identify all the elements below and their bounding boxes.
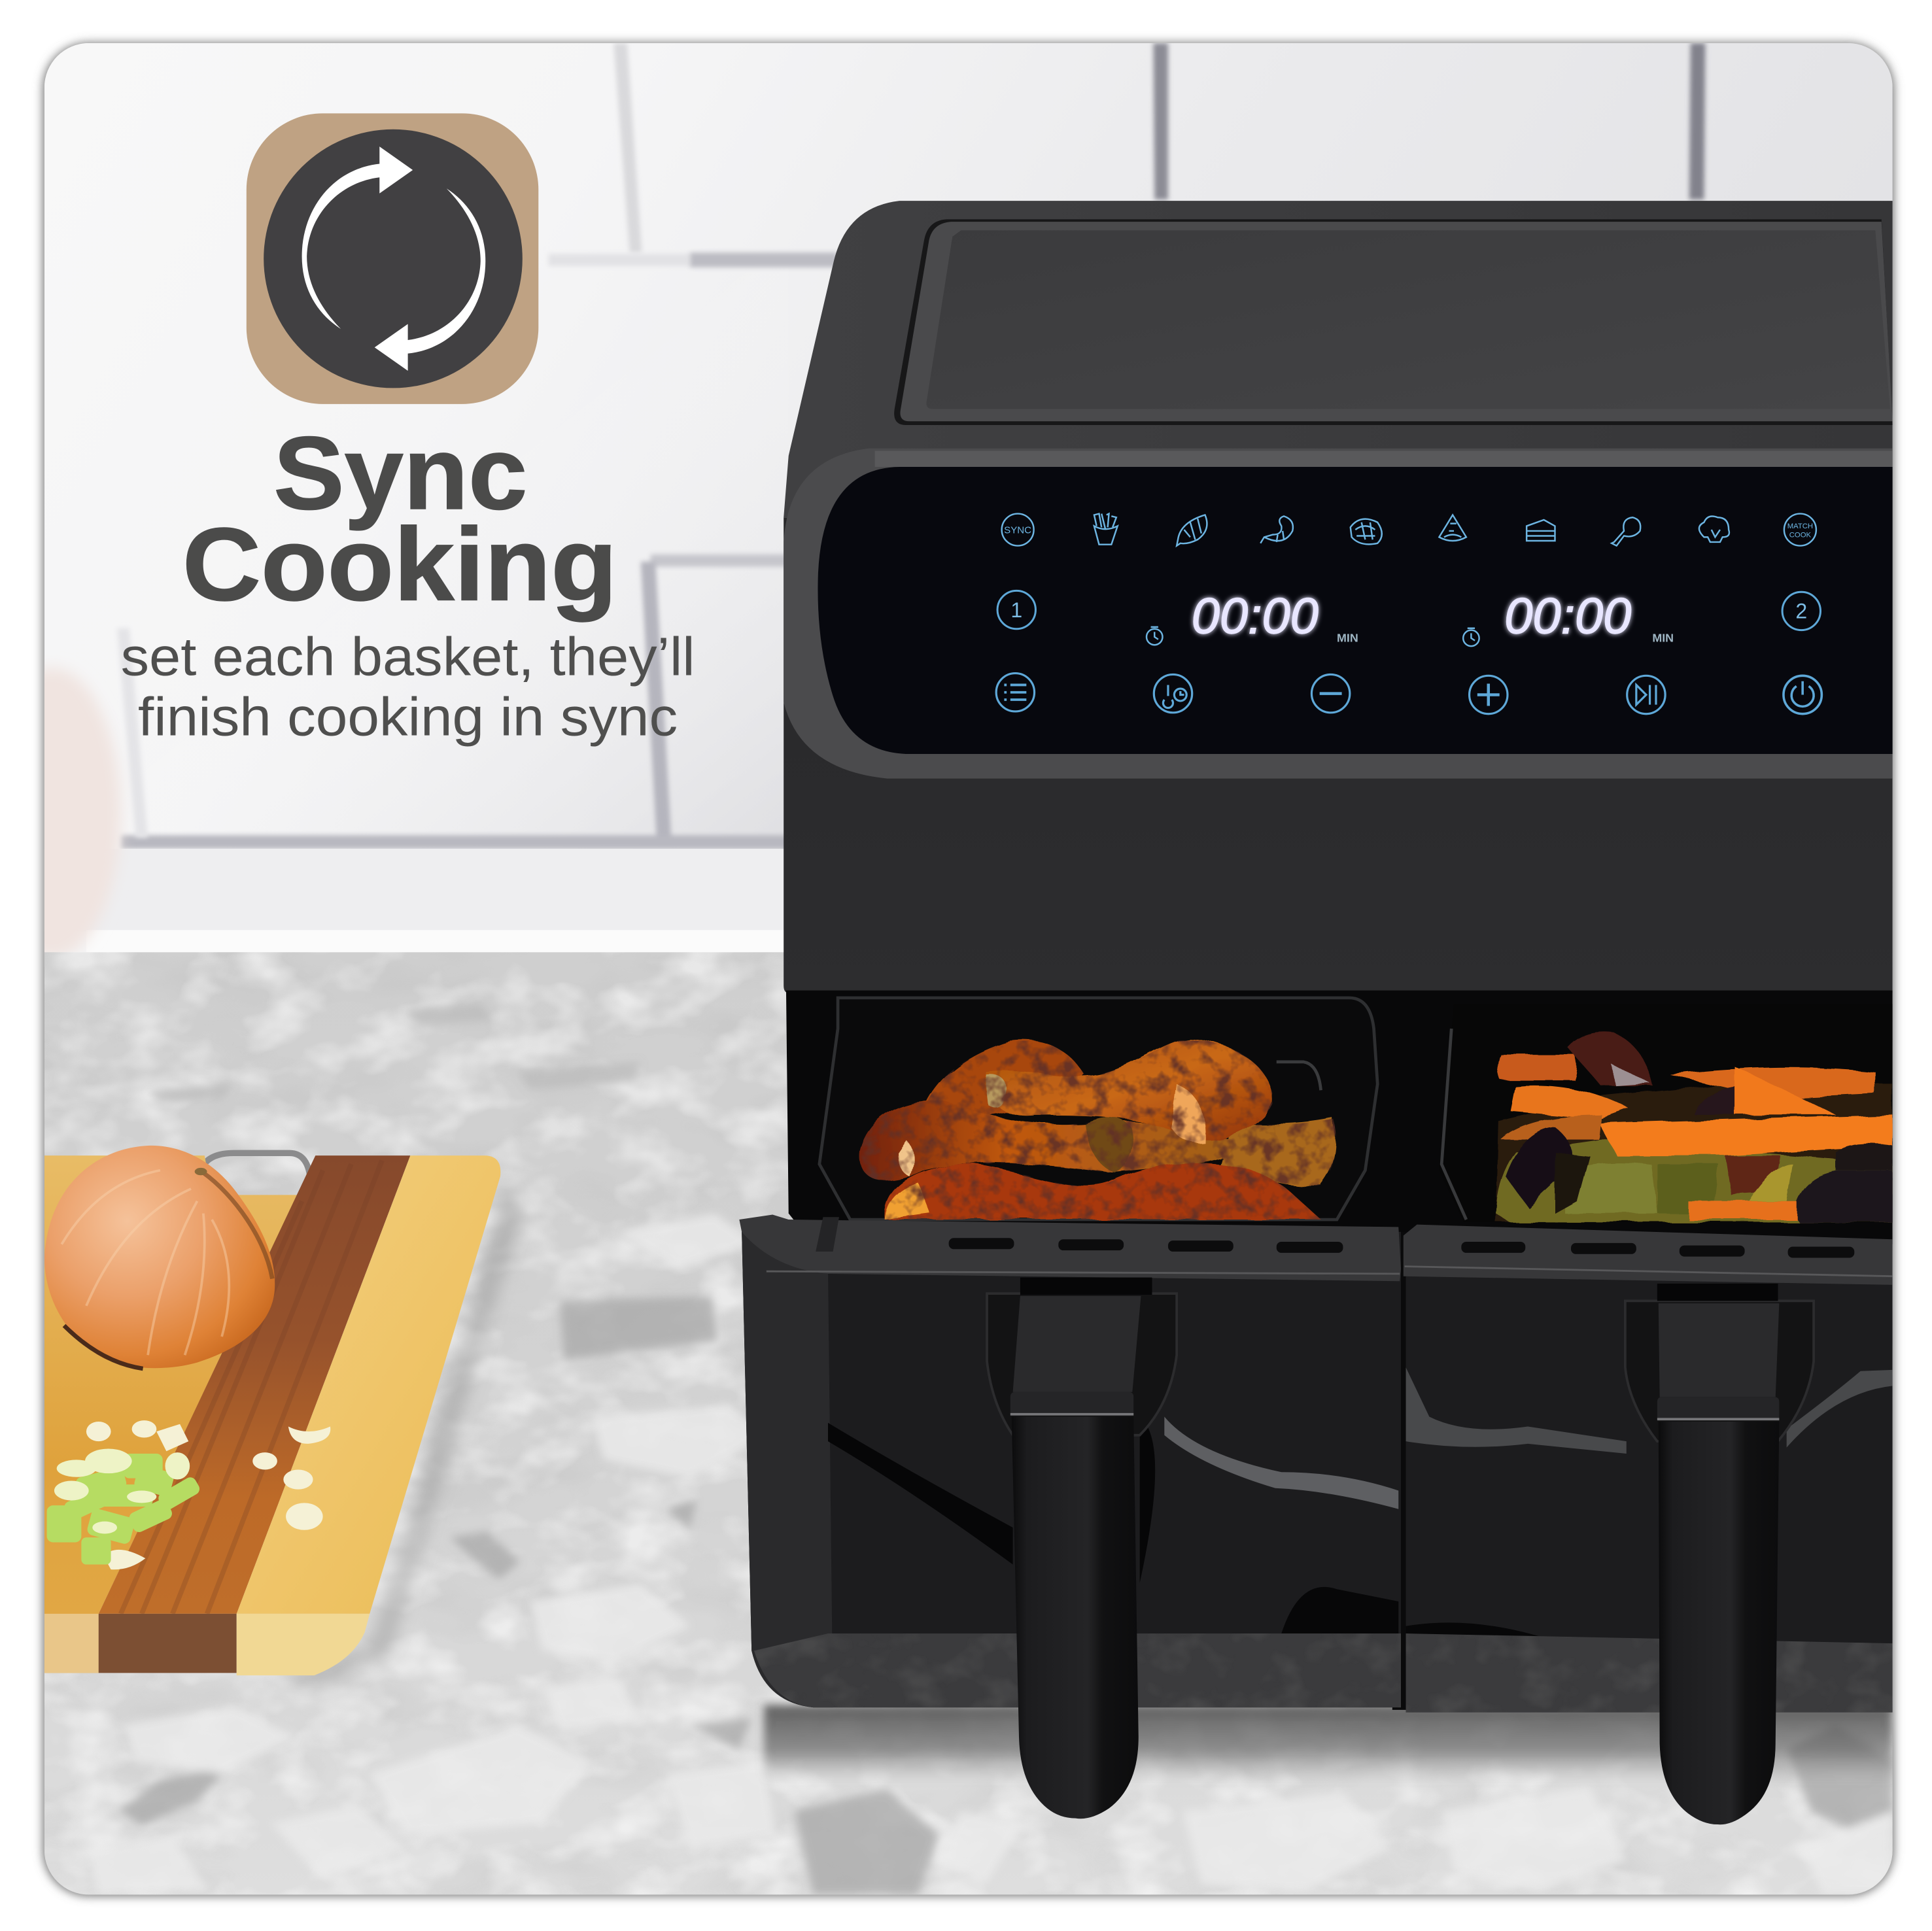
min label left: MIN — [1337, 632, 1358, 645]
drawer side panel — [742, 1232, 833, 1707]
fryer lid — [894, 219, 1893, 425]
board handle — [205, 1150, 311, 1174]
handle collar — [1657, 1397, 1779, 1419]
basket inner handle — [1277, 1062, 1321, 1090]
basket 2 button — [1782, 592, 1820, 630]
icon: minus button — [1311, 674, 1350, 713]
marble countertop — [44, 952, 1893, 1901]
handle bracket — [987, 1293, 1177, 1435]
icon: menu button — [996, 674, 1035, 711]
handle grip — [1659, 1422, 1779, 1824]
left drawer — [742, 1232, 1401, 1707]
left basket — [819, 998, 1377, 1220]
icon: match cook button — [1784, 514, 1816, 546]
air fryer shadow on counter — [764, 1705, 1893, 1781]
basket 2 button: 2 — [1795, 600, 1807, 623]
right drawer rim — [1404, 1225, 1893, 1285]
handle collar — [1010, 1392, 1133, 1414]
arrow bottom — [375, 188, 485, 371]
onion — [44, 1146, 275, 1369]
rim slots — [949, 1238, 1343, 1253]
fryer top housing — [784, 201, 1893, 517]
drawer front — [742, 1232, 1401, 1707]
drawer front — [1406, 1275, 1893, 1713]
icon: drumstick — [1612, 517, 1640, 546]
title: Cooking — [182, 506, 617, 622]
icon: steak — [1351, 519, 1382, 544]
icon: fries — [1094, 514, 1118, 545]
right drawer — [1406, 1275, 1893, 1713]
handle neck — [1013, 1296, 1141, 1392]
title: Sync — [273, 415, 527, 531]
icon: match cook button: MATCH — [1787, 522, 1813, 530]
title — [182, 415, 617, 622]
mode icons row — [1002, 514, 1816, 546]
icon: play pause button — [1627, 675, 1665, 714]
icon: broccoli — [1699, 517, 1729, 542]
icon: timer right — [1463, 628, 1479, 646]
timer display right: 00:00 — [1504, 588, 1631, 644]
timer display left: 00:00 — [1192, 588, 1319, 644]
control panel frame — [784, 449, 1893, 779]
terrazzo chips — [86, 1004, 1893, 1894]
drawer reflections — [1406, 1367, 1627, 1454]
basket 1 button — [997, 590, 1035, 629]
icon: fish — [1177, 515, 1207, 546]
air fryer — [739, 201, 1893, 1824]
left drawer rim — [739, 1215, 1401, 1281]
subtitle — [121, 626, 695, 747]
icon: temperature timer button — [1154, 674, 1192, 713]
basket shell — [1439, 1004, 1893, 1222]
board left maple — [44, 1155, 297, 1673]
drawer reflections — [828, 1423, 1013, 1565]
right basket — [1439, 1004, 1893, 1222]
drawer opening — [786, 991, 1893, 1244]
badge circle — [264, 129, 523, 388]
board shadow — [271, 1183, 523, 1685]
min label right: MIN — [1652, 632, 1674, 645]
subtitle: set each basket, they’ll — [121, 626, 695, 687]
handle bracket — [1625, 1301, 1814, 1441]
faded background object — [44, 666, 127, 957]
badge background — [247, 113, 538, 404]
fryer front body — [784, 517, 1893, 993]
left handle — [987, 1278, 1177, 1819]
roasted vegetables — [1496, 1032, 1893, 1222]
tiled wall — [44, 43, 1893, 967]
glossy lower reflection — [739, 1626, 1893, 1718]
cutting board with onion and scallions — [44, 1146, 523, 1685]
icon: sync button — [1002, 514, 1034, 546]
drawer seam — [1392, 1232, 1412, 1710]
control panel top highlight — [875, 451, 1893, 467]
icon: cake — [1527, 520, 1555, 541]
handle neck — [1659, 1303, 1779, 1397]
board walnut stripe — [99, 1155, 410, 1614]
basket 1 button: 1 — [1010, 598, 1022, 622]
right handle — [1625, 1284, 1814, 1824]
arrow top — [302, 146, 413, 329]
chicken drumsticks — [859, 1038, 1343, 1220]
icon: plus button — [1470, 675, 1508, 714]
panel glass — [818, 467, 1893, 754]
icon: sync button: SYNC — [1004, 525, 1031, 536]
board front edge — [44, 1614, 99, 1673]
icon: pizza — [1439, 515, 1466, 541]
icon: timer left — [1147, 627, 1162, 645]
rim slots — [1461, 1242, 1854, 1257]
icon: shrimp — [1260, 516, 1293, 543]
basket shell — [819, 998, 1377, 1220]
icon: sync arrows badge — [247, 113, 538, 404]
board right maple — [237, 1155, 500, 1614]
handle grip — [1012, 1416, 1139, 1819]
icon: power button — [1784, 675, 1821, 714]
icon: match cook button: COOK — [1789, 531, 1811, 539]
control panel — [818, 467, 1893, 754]
subtitle: finish cooking in sync — [138, 687, 678, 747]
scallions — [47, 1420, 330, 1569]
